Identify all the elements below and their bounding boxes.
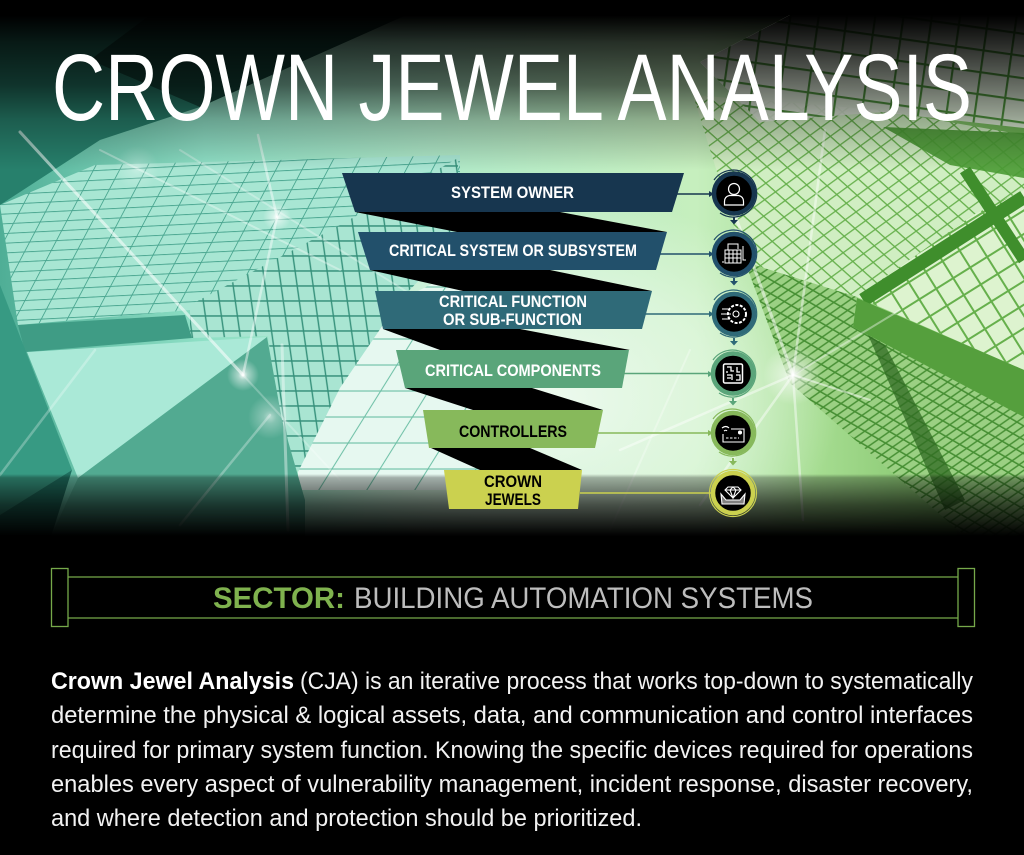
- funnel level: critical function or sub-function: OR SUB-FUNCTION: [443, 311, 582, 329]
- funnel diagram: [342, 170, 757, 516]
- left building: dark upper block: [0, 0, 440, 205]
- funnel shadows: [355, 212, 667, 470]
- funnel level: system owner: SYSTEM OWNER: [451, 184, 574, 202]
- description paragraph: (CJA) is an iterative process that works top-down to systematically: [300, 668, 973, 695]
- left building: roof grid: [0, 155, 460, 325]
- funnel level: controllers: [423, 410, 603, 448]
- funnel level: critical components: [396, 350, 629, 388]
- right building: dark roof band: [883, 127, 1024, 178]
- icon: function gear: [709, 290, 757, 337]
- right building: lower roof grid: [857, 190, 1024, 370]
- bottom fade: [0, 474, 1024, 536]
- left building: pale panel: [27, 337, 267, 478]
- light rays: [0, 130, 900, 530]
- funnel level: crown jewels: JEWELS: [485, 491, 541, 509]
- funnel level: critical function or sub-function: CRITICAL FUNCTION: [439, 293, 587, 311]
- icon: controller card: [708, 409, 756, 456]
- funnel level: crown jewels: CROWN: [484, 473, 542, 491]
- funnel level: crown jewels: [444, 470, 582, 509]
- banner frame: [52, 568, 974, 626]
- funnel level: system owner: [342, 173, 684, 212]
- icon: system owner person: [709, 170, 757, 217]
- connector lines: [580, 194, 712, 493]
- banner value: BUILDING AUTOMATION SYSTEMS: [354, 582, 813, 615]
- description paragraph: [51, 668, 973, 832]
- funnel level: critical system or subsystem: CRITICAL SYSTEM OR SUBSYSTEM: [389, 242, 637, 260]
- sector banner: [52, 568, 974, 626]
- right building: roof grid: [693, 95, 1024, 297]
- description paragraph: determine the physical & logical assets, data, and communication and control interfaces: [51, 702, 973, 729]
- icon: system network: [709, 230, 757, 277]
- funnel level: critical function or sub-function: [375, 291, 652, 329]
- glow points: [115, 146, 823, 439]
- arrow: [729, 398, 737, 406]
- icon: crown jewel: [710, 470, 756, 516]
- right building: dense facade: [745, 262, 1024, 540]
- description paragraph: enables every aspect of vulnerability management, incident response, disaster recovery,: [51, 771, 973, 798]
- right building: facade shadow strip: [868, 335, 965, 510]
- description paragraph: Crown Jewel Analysis: [51, 668, 294, 695]
- description paragraph: and where detection and protection should be prioritized.: [51, 805, 642, 832]
- left building: scaffold grid: [190, 158, 458, 470]
- left building: shadow band: [18, 315, 192, 352]
- top fade: [0, 0, 1024, 170]
- arrow: [730, 278, 738, 286]
- arrow: [729, 458, 737, 466]
- description paragraph: required for primary system function. Knowing the specific devices required for operations: [51, 737, 973, 764]
- left building: white panel with thin lines: [298, 250, 500, 490]
- arrow: [730, 217, 738, 224]
- funnel level: controllers: CONTROLLERS: [459, 423, 567, 441]
- left building: side column: [0, 285, 72, 515]
- arrow: [730, 338, 738, 346]
- right building: side band: [853, 298, 1024, 417]
- right building: upper grey grid: [700, 15, 1024, 128]
- banner label: SECTOR:: [213, 582, 345, 615]
- funnel level: critical components: CRITICAL COMPONENTS: [425, 362, 601, 380]
- icon: component chip: [708, 350, 756, 397]
- right building: dark cross beams: [863, 197, 1024, 300]
- left building: teal wall: [50, 337, 305, 538]
- funnel level: critical system or subsystem: [358, 232, 667, 270]
- centre bright haze: [240, 190, 840, 610]
